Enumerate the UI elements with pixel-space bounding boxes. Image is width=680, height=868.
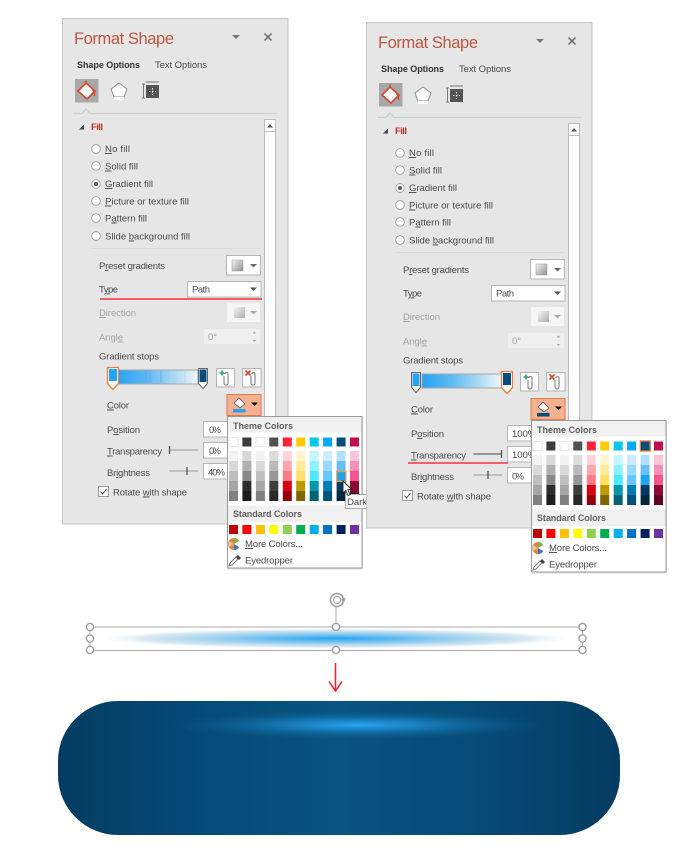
arrow — [329, 663, 342, 691]
icon: pane menu and close — [232, 34, 272, 40]
pill highlight — [163, 710, 553, 740]
type dropdown: Type — [99, 284, 118, 296]
more colors and eyedropper: Eyedropper — [245, 556, 293, 566]
angle: Angle — [99, 332, 123, 344]
transparency field: 100% — [512, 450, 537, 461]
radio options: Gradient fill — [409, 183, 457, 194]
more colors and eyedropper — [532, 542, 607, 570]
brightness field: Brightness — [411, 472, 454, 483]
transparency field: Transparency — [411, 450, 466, 462]
gradient stops: Gradient stops — [99, 352, 159, 362]
more colors and eyedropper: Eyedropper — [549, 560, 597, 570]
radio options — [396, 148, 494, 246]
icon: tab icons — [379, 83, 463, 106]
brightness field: Brightness — [107, 468, 150, 479]
radio options: Picture or texture fill — [105, 196, 189, 208]
preset gradients — [99, 256, 260, 275]
more colors and eyedropper: More Colors... — [549, 543, 607, 554]
direction: Direction — [99, 308, 136, 319]
position field: Position — [411, 429, 444, 440]
radio options: Solid fill — [409, 166, 442, 176]
direction: Direction — [403, 312, 440, 323]
preset gradients: Preset gradients — [403, 265, 469, 276]
radio options: Pattern fill — [409, 218, 451, 228]
preset gradients — [403, 260, 564, 279]
radio options — [92, 144, 190, 242]
panel: Format Shape, Transparency step — [366, 22, 592, 528]
angle: Angle — [403, 336, 427, 348]
brightness field — [411, 468, 538, 483]
color swatches — [229, 438, 359, 534]
angle: 0° — [512, 336, 521, 347]
radio options: Slide background fill — [409, 236, 494, 246]
brightness field: 0% — [512, 472, 525, 482]
standard colors heading: Standard Colors — [537, 513, 606, 523]
icon: tab icons — [75, 79, 159, 102]
tabs: Text Options — [459, 64, 511, 75]
position field: Position — [107, 425, 140, 436]
standard colors heading: Standard Colors — [233, 509, 302, 519]
more colors and eyedropper — [228, 538, 303, 566]
red underline — [100, 298, 262, 300]
brightness field: 40% — [208, 468, 226, 478]
angle — [99, 329, 260, 344]
rotate with shape checkbox: Rotate with shape — [113, 488, 187, 498]
tabs: Text Options — [155, 60, 207, 71]
icon: rotate handle — [330, 594, 344, 606]
color swatches — [533, 442, 663, 538]
color button — [411, 398, 565, 420]
tabs: Shape Options — [381, 64, 444, 74]
gradient stops — [403, 356, 565, 394]
transparency field — [107, 442, 234, 458]
position field — [107, 422, 234, 437]
fill heading — [383, 126, 407, 137]
tabs: Shape Options — [77, 60, 140, 70]
radio options: Gradient fill — [105, 179, 153, 190]
brightness field — [107, 464, 234, 479]
scrollbar — [264, 120, 276, 520]
type dropdown — [99, 282, 261, 297]
rotate with shape checkbox: Rotate with shape — [417, 492, 491, 502]
type dropdown — [403, 286, 565, 301]
position field: 0% — [209, 425, 222, 436]
selected gradient ellipse with handles — [86, 594, 586, 654]
angle — [403, 333, 564, 348]
radio options: Picture or texture fill — [409, 200, 493, 212]
type dropdown: Type — [403, 288, 422, 300]
transparency field — [411, 446, 538, 462]
fill heading — [79, 122, 103, 133]
radio options: No fill — [409, 148, 434, 159]
radio options: No fill — [105, 144, 130, 155]
scrollbar — [568, 124, 580, 524]
color picker popup, right — [532, 420, 667, 574]
gradient stops — [99, 352, 261, 390]
fill heading: Fill — [91, 122, 103, 133]
color button: Color — [411, 404, 433, 416]
title: Format Shape — [378, 34, 478, 52]
color button — [107, 394, 261, 416]
more colors and eyedropper: More Colors... — [245, 539, 303, 550]
theme colors heading: Theme Colors — [537, 425, 597, 435]
tabs — [77, 60, 207, 71]
fill heading: Fill — [395, 126, 407, 137]
blue glossy pill — [58, 701, 620, 835]
panel: Format Shape, Type Path step — [62, 18, 288, 524]
direction — [99, 303, 260, 322]
theme colors heading: Theme Colors — [233, 421, 293, 431]
icon: pane menu and close — [536, 38, 576, 44]
position field — [411, 426, 538, 441]
color picker popup, left — [228, 416, 363, 570]
type dropdown: Path — [496, 288, 514, 300]
gradient stops: Gradient stops — [403, 356, 463, 366]
transparency field: Transparency — [107, 446, 162, 458]
tabs — [381, 64, 511, 75]
radio options: Pattern fill — [105, 214, 147, 224]
selected swatch highlight — [337, 472, 346, 482]
color button: Color — [107, 400, 129, 412]
icon: mouse cursor — [343, 481, 352, 496]
type dropdown: Path — [192, 284, 210, 296]
title: Format Shape — [74, 30, 174, 48]
angle: 0° — [208, 332, 217, 343]
resize handles — [86, 623, 586, 654]
tooltip: Dark — [347, 497, 367, 508]
radio options: Slide background fill — [105, 232, 190, 242]
radio options: Solid fill — [105, 162, 138, 172]
red underline — [408, 462, 508, 464]
direction — [403, 307, 564, 326]
selected swatch highlight — [640, 441, 650, 451]
transparency field: 0% — [209, 446, 222, 457]
preset gradients: Preset gradients — [99, 261, 165, 272]
position field: 100% — [512, 429, 537, 440]
